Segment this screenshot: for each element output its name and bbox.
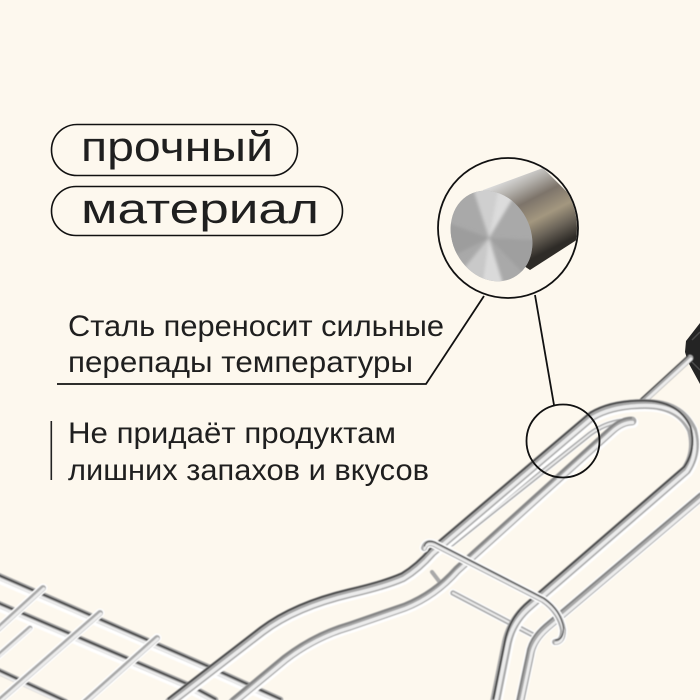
pill heading: материал <box>52 185 342 236</box>
wire grate <box>0 575 281 700</box>
pill heading: прочный: прочный <box>81 123 273 170</box>
magnifier circle: wire detail <box>526 404 600 478</box>
text block: no odours or flavours: Не придаёт продуктам <box>68 417 396 450</box>
divider bar <box>50 421 52 480</box>
icon: black handle end <box>685 323 700 384</box>
text block: no odours or flavours: лишних запахов и вкусов <box>68 454 429 487</box>
pill heading: прочный <box>52 123 298 176</box>
callout leader line between circles <box>535 295 554 405</box>
text block: temperature resistance: Сталь переносит сильные <box>68 310 444 343</box>
callout leader line to text <box>57 296 484 384</box>
text block: no odours or flavours <box>68 417 429 487</box>
magnifier circle: steel rod end <box>437 157 579 299</box>
steel handle wires <box>168 356 700 700</box>
pill heading: материал: материал <box>81 185 319 232</box>
text block: temperature resistance: перепады температуры <box>68 346 413 379</box>
text block: temperature resistance <box>68 310 444 379</box>
